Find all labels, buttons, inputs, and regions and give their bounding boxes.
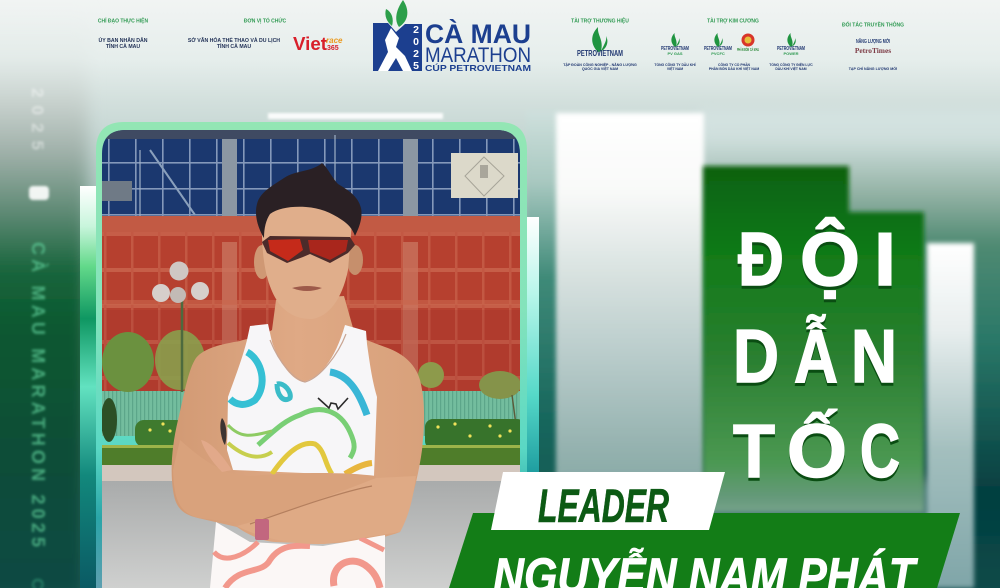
nose and mouth — [292, 286, 322, 291]
blue mark — [373, 23, 422, 71]
building: blue scaffold — [102, 130, 520, 218]
tank pattern: yellow — [228, 443, 272, 457]
logo: Ca Mau Marathon — [373, 0, 531, 73]
organiser text block: organiser: TỈNH CÀ MAU — [217, 43, 251, 50]
sign on building — [451, 153, 518, 198]
sponsor: diamond — [654, 18, 813, 71]
sponsor: diamond: TỔNG CÔNG TY DẦU KHÍ — [654, 62, 697, 67]
leader label: LEADER — [538, 479, 669, 532]
sponsor: brand: TẬP ĐOÀN CÔNG NGHIỆP - NĂNG LƯỢNG — [563, 62, 637, 67]
leader label — [491, 472, 725, 532]
title shadow: D — [733, 317, 779, 401]
watch band — [255, 519, 269, 540]
small white bar right — [927, 243, 974, 588]
name banner — [449, 513, 960, 588]
title shadow: I — [874, 220, 896, 304]
sponsor: diamond: CÔNG TY CỔ PHẦN — [718, 62, 751, 67]
title shadow: Đ — [738, 220, 784, 304]
neck and shoulders — [172, 296, 424, 544]
sponsor: diamond: PETROVIETNAM — [704, 46, 732, 52]
arm tattoo — [220, 418, 226, 445]
title shadow — [733, 220, 900, 496]
organiser text block: steering: TỈNH CÀ MAU — [106, 43, 140, 50]
title letters: Ẫ — [794, 314, 838, 398]
sponsor: diamond: PHÂN BÓN CÀ MAU — [737, 45, 759, 52]
organiser text block: steering — [98, 16, 149, 50]
organiser text block: organiser: ĐƠN VỊ TỔ CHỨC — [244, 18, 287, 24]
year: 2 — [413, 24, 419, 36]
sponsor: brand: PETROVIETNAM — [577, 49, 623, 58]
logo: Vietrace365: race — [326, 36, 343, 45]
sponsor: diamond: PETROVIETNAM — [661, 46, 689, 52]
trees and bushes — [101, 330, 525, 466]
sunglasses — [262, 236, 355, 263]
sponsor: diamond: DẦU KHÍ VIỆT NAM — [775, 66, 807, 71]
media partner: NĂNG LƯỢNG MỚI — [856, 37, 890, 45]
title shadow: N — [851, 317, 897, 401]
top highlight strip — [268, 113, 443, 119]
photo — [101, 130, 525, 588]
header logos — [98, 0, 904, 73]
right blurred white panel — [556, 113, 704, 515]
year: 5 — [413, 60, 419, 72]
fence — [102, 391, 520, 436]
title shadow: Ẫ — [794, 317, 838, 401]
sponsor: diamond: PHÂN BÓN DẦU KHÍ VIỆT NAM — [709, 66, 759, 71]
media partner — [842, 20, 904, 71]
title shadow: Ộ — [800, 220, 860, 304]
runner — [378, 28, 412, 71]
title letters: Ố — [787, 409, 847, 493]
sponsor: diamond: TÀI TRỢ KIM CƯƠNG — [707, 18, 759, 24]
title letters: T — [733, 409, 775, 493]
tank pattern: green — [258, 410, 354, 458]
vertical side text — [28, 88, 49, 588]
sponsor: diamond: PVCFC — [711, 51, 725, 56]
year — [413, 24, 419, 72]
logo: Vietrace365: 365 — [327, 45, 339, 52]
title letters: Đ — [738, 217, 784, 301]
crossed arms — [173, 440, 416, 544]
photo frame — [96, 122, 527, 588]
media partner: ĐỐI TÁC TRUYỀN THÔNG — [842, 20, 904, 28]
logo on tank — [318, 398, 348, 409]
title letters: N — [851, 314, 897, 398]
organiser text block: organiser: SỞ VĂN HÓA THỂ THAO VÀ DU LỊCH — [188, 36, 280, 44]
sponsor: brand — [563, 16, 637, 71]
sponsor: diamond: PETROVIETNAM — [777, 46, 805, 52]
face — [262, 206, 352, 312]
logo: Ca Mau Marathon: MARATHON — [425, 44, 531, 67]
tank pattern: coral — [214, 542, 258, 558]
title letters: Ộ — [800, 217, 860, 301]
media partner: PetroTimes — [855, 46, 891, 55]
left gradient bar — [80, 186, 98, 588]
tank top — [210, 324, 385, 588]
organiser text block: organiser — [188, 18, 287, 50]
ears — [254, 245, 267, 279]
event name: CÀ MAU — [425, 18, 531, 49]
sponsor: brand: TÀI TRỢ THƯƠNG HIỆU — [571, 16, 629, 24]
title letters: C — [860, 409, 900, 493]
green stepped block — [703, 166, 924, 512]
hair — [256, 163, 362, 238]
logo: Ca Mau Marathon: CÚP PETROVIETNAM — [425, 62, 531, 73]
logo: Vietrace365: Viet — [293, 34, 327, 54]
logo: Vietrace365 — [293, 34, 343, 54]
kerb — [102, 465, 520, 482]
organiser text block: steering: CHỈ ĐẠO THỰC HIỆN — [98, 16, 149, 24]
title shadow: Ố — [787, 412, 847, 496]
sponsor: brand: QUỐC GIA VIỆT NAM — [582, 66, 618, 71]
year: 2 — [413, 48, 419, 60]
vertical side text: 2025 — [28, 88, 47, 150]
star — [29, 186, 49, 200]
athlete — [172, 163, 424, 588]
organiser text block: steering: ỦY BAN NHÂN DÂN — [99, 37, 148, 44]
media partner: TẠP CHÍ NĂNG LƯỢNG MỚI — [849, 66, 897, 71]
sponsor: diamond: TỔNG CÔNG TY ĐIỆN LỰC — [769, 62, 813, 67]
title shadow: C — [860, 412, 900, 496]
tank pattern: blue — [230, 352, 262, 404]
vertical side text: CÀ MAU MARATHON 2025 — [28, 242, 49, 547]
title letters: D — [733, 314, 779, 398]
right thin white bar — [524, 217, 539, 472]
street lamp — [152, 262, 209, 392]
sponsor: diamond: PV GAS — [667, 51, 683, 56]
leaves — [385, 0, 407, 27]
road — [102, 481, 520, 588]
title shadow: T — [733, 412, 775, 496]
title letters — [733, 217, 900, 493]
building: red scaffold — [102, 216, 520, 391]
title letters: I — [874, 217, 896, 301]
necklace — [270, 334, 346, 382]
year: 0 — [413, 36, 419, 48]
title: Đội Dẫn Tốc — [733, 217, 900, 496]
lower fill of white panel — [552, 480, 952, 540]
sponsor: diamond: VIỆT NAM — [667, 66, 683, 71]
sponsor: diamond: POWER — [783, 51, 799, 56]
